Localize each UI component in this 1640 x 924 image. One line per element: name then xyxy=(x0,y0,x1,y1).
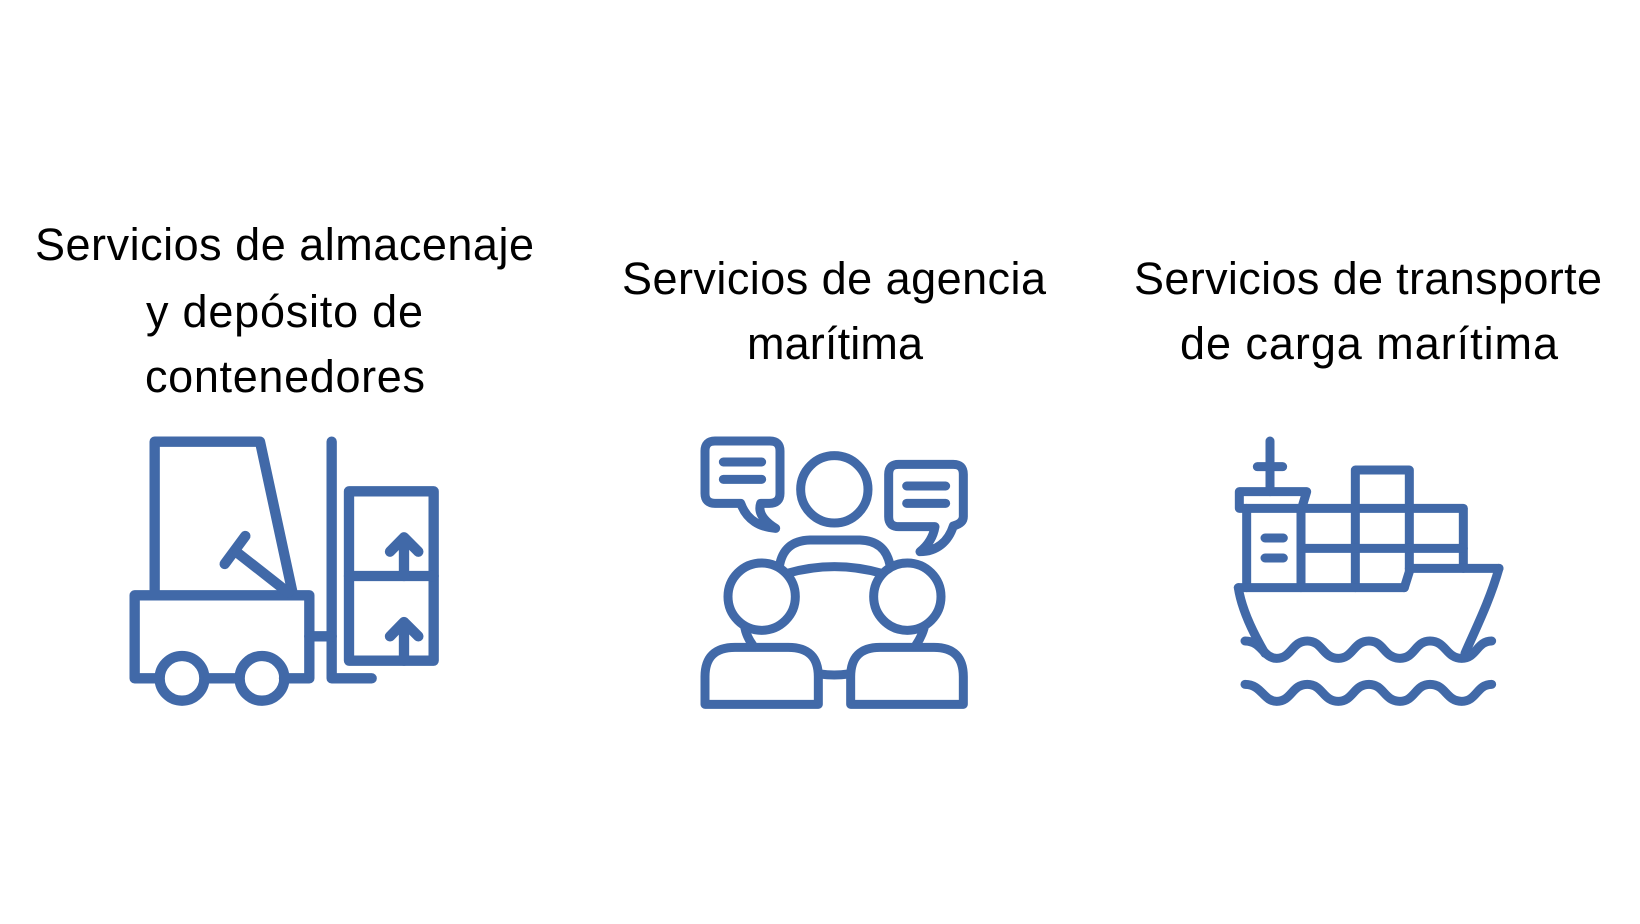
heading: almacenaje: Servicios de almacenaje xyxy=(35,219,534,270)
icon: meeting people with speech bubbles xyxy=(705,441,963,704)
heading: almacenaje xyxy=(35,219,534,402)
heading: transporte maritimo xyxy=(1134,253,1602,369)
heading: almacenaje: contenedores xyxy=(145,351,425,402)
heading: almacenaje: y depósito de xyxy=(146,286,423,337)
heading: agencia maritima: marítima xyxy=(747,318,924,369)
heading: transporte maritimo: Servicios de transporte xyxy=(1134,253,1602,304)
icon: container ship on waves xyxy=(1238,441,1499,701)
heading: transporte maritimo: de carga marítima xyxy=(1180,318,1559,369)
heading: agencia maritima: Servicios de agencia xyxy=(622,253,1047,304)
heading: agencia maritima xyxy=(622,253,1047,369)
icon: forklift xyxy=(135,442,434,701)
